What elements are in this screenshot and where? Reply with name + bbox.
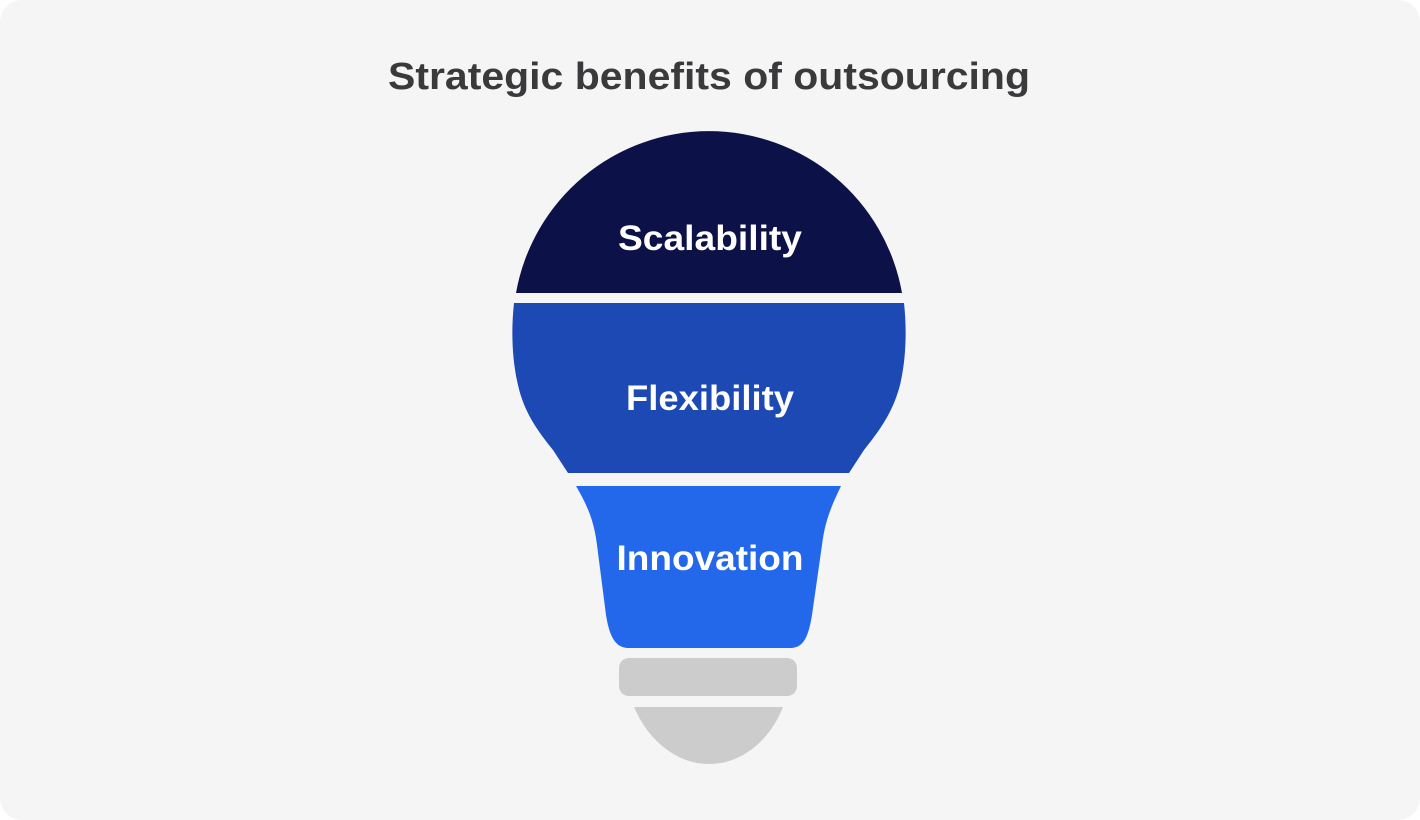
lightbulb	[512, 131, 906, 764]
bulb base: cap	[634, 707, 783, 764]
bulb section: Scalability	[516, 131, 902, 293]
bulb section: Innovation: Innovation	[616, 539, 804, 578]
bulb section: Innovation	[576, 486, 841, 648]
bulb base: collar	[619, 658, 797, 696]
bulb section: Flexibility	[512, 303, 906, 473]
bulb section: Scalability: Scalability	[618, 219, 803, 258]
title: Strategic benefits of outsourcing	[388, 56, 1030, 98]
bulb section: Flexibility: Flexibility	[626, 379, 795, 418]
